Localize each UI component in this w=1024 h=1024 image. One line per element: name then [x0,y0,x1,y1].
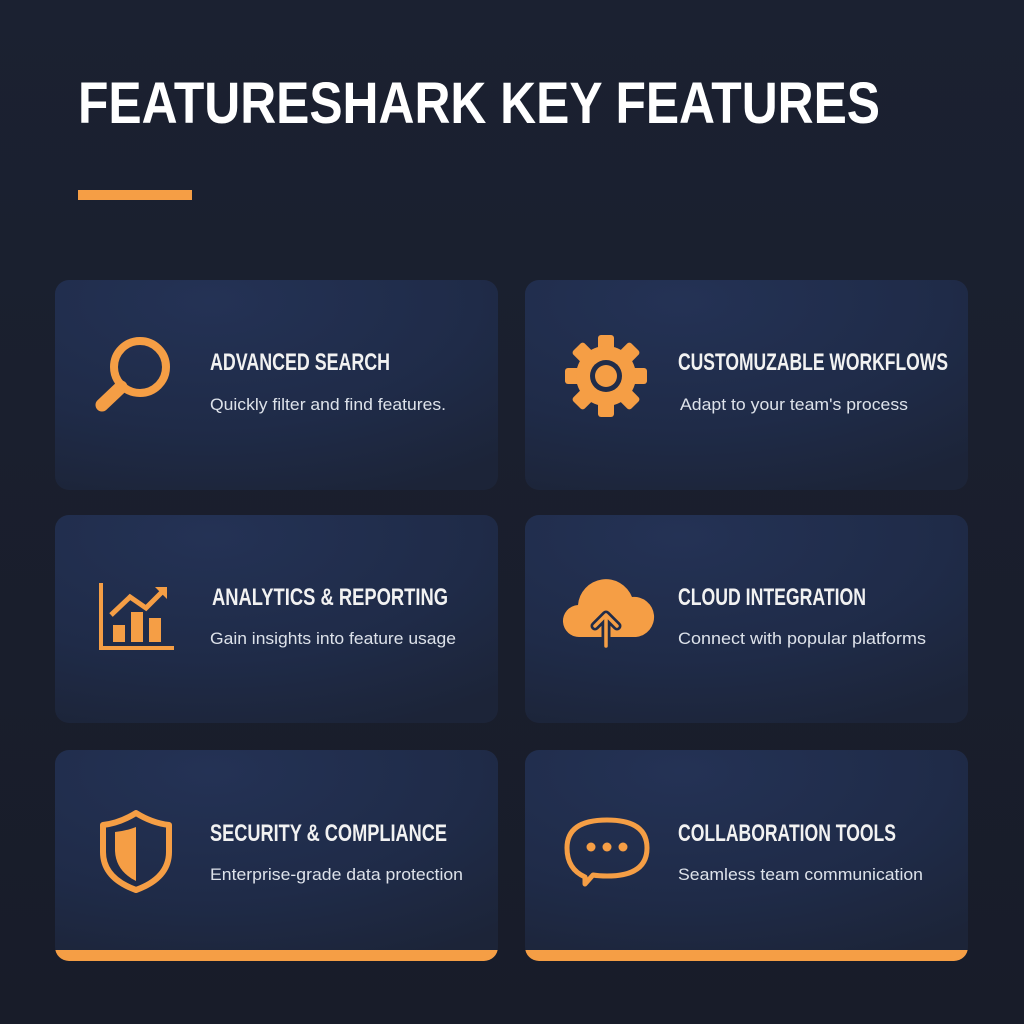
icon: bar chart [101,583,174,648]
panel: analytics [55,515,498,723]
description: Enterprise-grade data protection [210,865,463,884]
panel: customizable workflows [525,280,968,490]
heading: ANALYTICS & REPORTING [212,584,448,611]
heading: CLOUD INTEGRATION [678,584,866,611]
panel: collaboration [525,750,968,961]
title: FEATURESHARK KEY FEATURES [78,71,880,136]
icon: gear [565,335,647,417]
icon: cloud upload [563,579,654,646]
heading: SECURITY & COMPLIANCE [210,820,447,847]
description: Gain insights into feature usage [210,629,456,648]
panel: cloud integration [525,515,968,723]
description: Quickly filter and find features. [210,395,446,414]
heading: ADVANCED SEARCH [210,349,390,376]
description: Seamless team communication [678,865,923,884]
icon: magnifier [102,341,166,405]
title underline accent [78,190,192,200]
description: Connect with popular platforms [678,629,926,648]
panel: security [55,750,498,961]
heading: COLLABORATION TOOLS [678,820,896,847]
panel: advanced search [55,280,498,490]
description: Adapt to your team's process [680,395,908,414]
icon: shield [103,813,169,890]
icon: chat bubble [567,820,647,884]
